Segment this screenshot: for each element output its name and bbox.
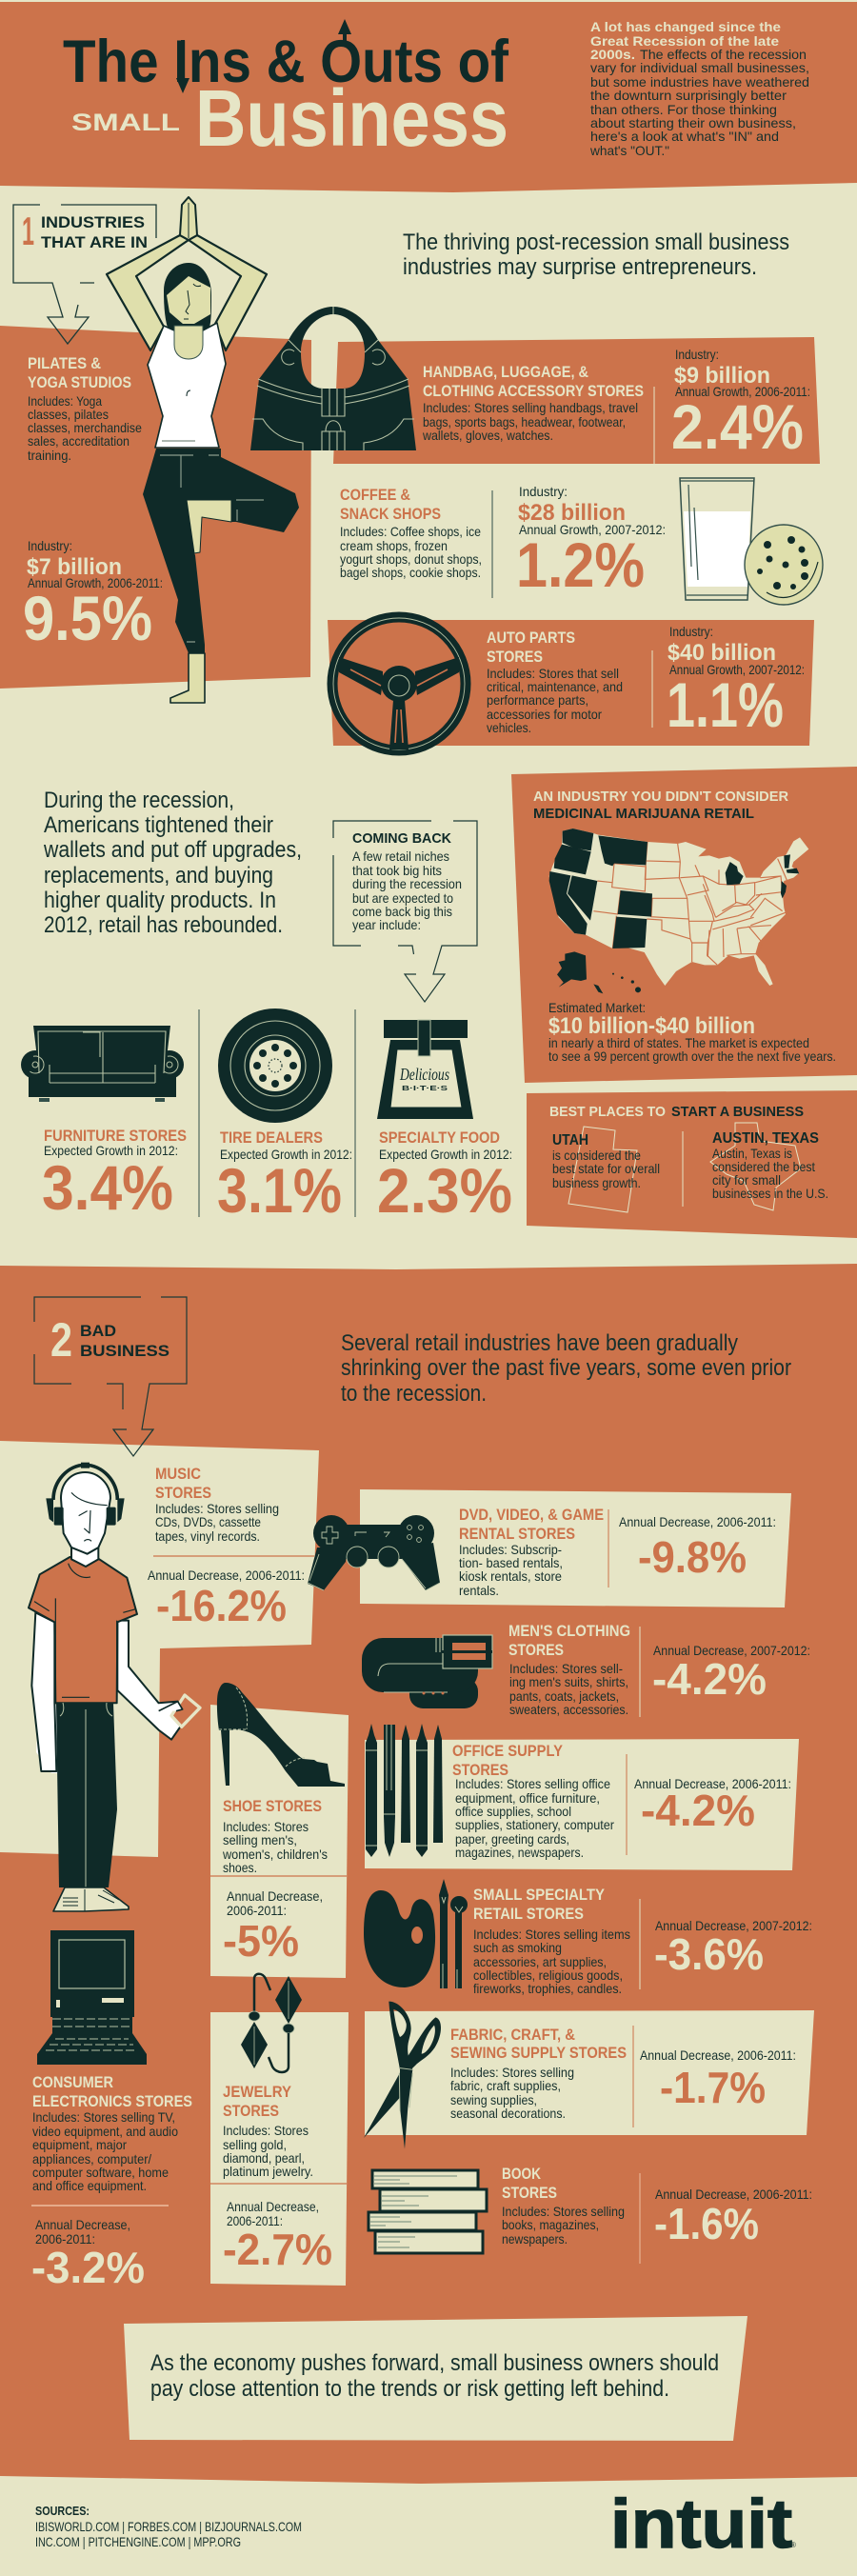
sources: IBISWORLD.COM | FORBES.COM | BIZJOURNALS.COM (35, 2519, 302, 2534)
text: jewelry block: platinum jewelry. (223, 2164, 313, 2179)
icon: folded shirt (362, 1635, 492, 1708)
text: office supply block (452, 1742, 791, 1860)
text: auto parts block: 1.1% (667, 669, 784, 740)
text: consumer electronics block: and office equipment. (32, 2178, 147, 2193)
text: shoe stores block: -5% (223, 1916, 299, 1966)
panel: best places to start a business: businesses in the U.S. (712, 1186, 828, 1201)
text: jewelry block: selling gold, (223, 2137, 287, 2152)
text: jewelry block: 2006-2011: (227, 2213, 283, 2228)
callout: coming back: year include: (352, 917, 421, 932)
text: handbag block: CLOTHING ACCESSORY STORES (423, 382, 644, 400)
section 2 badge: BAD (80, 1322, 116, 1340)
text: office supply block: STORES (452, 1761, 508, 1779)
text: coffee block: cream shops, frozen (340, 538, 448, 553)
section 1 intro text (403, 230, 789, 280)
text: mens clothing block: MEN'S CLOTHING (508, 1622, 630, 1640)
recession paragraph (43, 788, 302, 938)
text: book stores block: Includes: Stores selling (502, 2204, 625, 2219)
text: tire dealers: TIRE DEALERS (220, 1128, 323, 1147)
text: shoe stores block: Includes: Stores (223, 1819, 309, 1834)
text: coffee block: SNACK SHOPS (340, 505, 441, 523)
icon: earrings (241, 1974, 302, 2072)
text: coffee block: yogurt shops, donut shops, (340, 551, 482, 567)
intro text: The effects of the recession (640, 47, 807, 62)
text: consumer electronics block: 2006-2011: (35, 2231, 95, 2247)
intro text: the downturn surprisingly better (590, 88, 787, 103)
text: book stores block: BOOK (502, 2165, 542, 2183)
title: SMALL (71, 110, 180, 136)
section 2 badge: BUSINESS (80, 1342, 169, 1360)
text: furniture stores: FURNITURE STORES (44, 1127, 187, 1145)
panel: medicinal marijuana retail: AN INDUSTRY YOU DIDN'T CONSIDER (533, 789, 788, 805)
text: pilates block: Industry: (28, 538, 72, 553)
text: small specialty block: such as smoking (473, 1940, 562, 1955)
text: auto parts block: STORES (487, 648, 543, 666)
texas outline (710, 1123, 801, 1210)
icon: handbag (250, 307, 416, 450)
text: coffee block (340, 484, 666, 600)
section 1 intro text: The thriving post-recession small business (403, 230, 789, 255)
recession paragraph: higher quality products. In (44, 888, 276, 913)
text: consumer electronics block: ELECTRONICS STORES (32, 2092, 192, 2110)
recession paragraph: During the recession, (44, 788, 234, 813)
text: dvd rental block: tion- based rentals, (459, 1555, 563, 1570)
text: consumer electronics block: -3.2% (31, 2243, 145, 2292)
logo: intuit: ® (790, 2541, 796, 2549)
text: office supply block: office supplies, school (455, 1804, 571, 1819)
text: specialty food (377, 1128, 512, 1226)
section 1 badge (13, 205, 156, 344)
intro text: Great Recession of the late (590, 33, 779, 49)
text: small specialty block: RETAIL STORES (473, 1905, 584, 1923)
panel: fabric craft background (365, 2010, 814, 2135)
text: furniture stores: Expected Growth in 2012: (44, 1143, 178, 1158)
section 1 badge: 1 (22, 209, 34, 253)
text: shoe stores block: shoes. (223, 1860, 257, 1875)
icon: sofa (21, 1026, 184, 1102)
badge arrow tip over panel (113, 1429, 153, 1456)
text: dvd rental block: rentals. (459, 1583, 499, 1598)
text: fabric craft block (450, 2026, 796, 2127)
text: shoe stores block: women's, children's (222, 1847, 328, 1862)
icon: up arrow on O (338, 19, 351, 44)
callout: coming back: COMING BACK (352, 830, 451, 847)
callout: coming back: that took big hits (352, 863, 442, 878)
icon: game controller (308, 1515, 440, 1590)
icon: delicious bites bag (377, 1020, 473, 1119)
text: office supply block: paper, greeting cards, (455, 1831, 569, 1847)
text: fabric craft block: SEWING SUPPLY STORES (450, 2044, 627, 2062)
text: handbag block: Includes: Stores selling handbags, travel (423, 400, 638, 415)
panel: shoe stores background (210, 1705, 349, 1978)
text: music stores block: CDs, DVDs, cassette (155, 1514, 261, 1529)
text: consumer electronics block: computer software, home (32, 2165, 169, 2180)
panel: best places to start a business: is considered the (552, 1148, 641, 1163)
text: handbag block: $9 billion (674, 363, 770, 389)
text: coffee block: Industry: (519, 484, 568, 499)
text: coffee block: COFFEE & (340, 486, 410, 504)
section 2 badge (34, 1297, 187, 1456)
recession paragraph: wallets and put off upgrades, (43, 837, 302, 863)
section 1 badge: THAT ARE IN (41, 233, 148, 251)
panel: jewelry background (210, 2012, 349, 2286)
intro text: 2000s. (590, 47, 635, 62)
text: dvd rental block: DVD, VIDEO, & GAME (459, 1506, 604, 1524)
text: office supply block: supplies, stationery, computer (455, 1817, 614, 1832)
section 1 badge: INDUSTRIES (41, 213, 145, 231)
text: handbag block: Annual Growth, 2006-2011: (675, 384, 810, 399)
title: The Ins & Outs of (63, 29, 509, 95)
callout: coming back: but are expected to (352, 890, 453, 906)
panel: best places to start a business: Austin, Texas is (712, 1146, 792, 1161)
text: music stores block: tapes, vinyl records. (155, 1528, 260, 1544)
panel: conclusion: As the economy pushes forward, small business owners should (150, 2350, 719, 2376)
text: small specialty block: -3.6% (654, 1929, 764, 1979)
logo: intuit: intuit (610, 2486, 792, 2563)
text: dvd rental block: Includes: Subscrip- (459, 1542, 562, 1557)
text: small specialty block: SMALL SPECIALTY (473, 1886, 606, 1904)
text: music stores block: MUSIC (155, 1465, 201, 1483)
callout: coming back: come back big this (352, 904, 452, 919)
callout: coming back (333, 821, 477, 1002)
text: music stores block (148, 1465, 314, 1630)
text: pilates block: YOGA STUDIOS (28, 373, 131, 391)
icon: scissors (364, 2002, 441, 2149)
text: handbag block: bags, sports bags, headwear, footwear, (423, 414, 626, 429)
panel: best places to start a business: best state for overall (552, 1161, 660, 1176)
text: music stores block: -16.2% (156, 1581, 287, 1630)
panel: auto parts background (328, 620, 814, 746)
title (63, 29, 509, 163)
text: music stores block: Annual Decrease, 2006-2011: (148, 1568, 305, 1583)
icon: glass of milk and cookie (680, 478, 823, 605)
panel: medicinal marijuana retail: MEDICINAL MARIJUANA RETAIL (533, 806, 754, 822)
text: jewelry block (210, 2083, 347, 2274)
text: auto parts block: $40 billion (668, 640, 776, 666)
text: small specialty block: accessories, art supplies, (473, 1954, 607, 1969)
section 2 background (0, 1264, 857, 2484)
text: handbag block (422, 347, 810, 464)
text: small specialty block: fireworks, trophies, candles. (473, 1981, 622, 1996)
intro text: about starting their own business, (590, 115, 796, 130)
text: handbag block: wallets, gloves, watches. (422, 428, 553, 443)
text: pilates block: sales, accreditation (28, 433, 130, 449)
text: mens clothing block: STORES (508, 1641, 564, 1659)
panel: best places to start a business: BEST PLACES TO (549, 1104, 666, 1120)
text: mens clothing block: ing men's suits, shirts, (509, 1674, 628, 1689)
icon: high heel shoe (217, 1683, 345, 1787)
text: jewelry block: -2.7% (223, 2225, 332, 2274)
text: auto parts block (487, 624, 805, 740)
text: tire dealers (217, 1128, 352, 1226)
text: pilates block: Includes: Yoga (28, 393, 102, 409)
panel: best places to start a business: UTAH (552, 1132, 588, 1148)
text: small specialty block: Includes: Stores selling items (473, 1927, 630, 1942)
text: jewelry block: diamond, pearl, (223, 2150, 305, 2166)
intro text: vary for individual small businesses, (590, 60, 809, 75)
icon: delicious bites bag: Delicious (399, 1065, 449, 1084)
text: coffee block: Includes: Coffee shops, ice (340, 524, 481, 539)
text: shoe stores block: selling men's, (223, 1832, 297, 1847)
text: shoe stores block: SHOE STORES (223, 1797, 322, 1815)
text: pilates block: $7 billion (27, 554, 122, 580)
text: shoe stores block (210, 1797, 347, 1966)
intro text: what's "OUT." (589, 143, 669, 158)
text: book stores block: books, magazines, (502, 2217, 599, 2232)
header band (0, 2, 857, 192)
text: consumer electronics block (31, 2073, 192, 2292)
text: dvd rental block: kiosk rentals, store (459, 1568, 562, 1584)
text: furniture stores: 3.4% (42, 1152, 173, 1223)
text: auto parts block: Industry: (669, 624, 713, 639)
section 2 intro text: shrinking over the past five years, some even prior (341, 1355, 791, 1381)
text: consumer electronics block: video equipment, and audio (32, 2124, 178, 2139)
section 1 intro text: industries may surprise entrepreneurs. (403, 254, 757, 280)
divider between sofa and tire (198, 1009, 200, 1217)
sources: SOURCES: (35, 2504, 90, 2518)
intro text: here's a look at what's "IN" and (590, 129, 779, 144)
text: book stores block: STORES (502, 2184, 557, 2202)
text: jewelry block: JEWELRY (223, 2083, 292, 2101)
text: consumer electronics block: CONSUMER (32, 2073, 113, 2091)
text: small specialty block (473, 1886, 812, 1996)
intro text: than others. For those thinking (590, 102, 777, 117)
text: office supply block: Includes: Stores selling office (455, 1776, 610, 1791)
text: office supply block: -4.2% (641, 1786, 755, 1835)
callout: coming back: A few retail niches (352, 849, 449, 864)
text: pilates block: classes, merchandise (28, 420, 142, 435)
text: auto parts block: AUTO PARTS (487, 629, 575, 647)
text: pilates block: PILATES & (28, 354, 101, 372)
text: fabric craft block: Annual Decrease, 2006-2011: (640, 2047, 796, 2063)
text: book stores block: Annual Decrease, 2006-2011: (655, 2187, 812, 2202)
text: music stores block: Includes: Stores selling (155, 1501, 279, 1516)
text: mens clothing block: -4.2% (652, 1654, 767, 1704)
text: office supply block: OFFICE SUPPLY (452, 1742, 564, 1760)
icon: down arrow on I (176, 40, 189, 93)
panel: dvd rental background (360, 1489, 791, 1608)
text: pilates block: training. (28, 448, 71, 463)
icon: yoga woman (107, 197, 299, 703)
text: office supply block: equipment, office furniture, (455, 1790, 600, 1806)
text: fabric craft block: -1.7% (660, 2063, 766, 2112)
utah outline (568, 1127, 637, 1212)
sources: INC.COM | PITCHENGINE.COM | MPP.ORG (35, 2534, 241, 2549)
text: office supply block: magazines, newspapers. (455, 1845, 584, 1860)
text: music stores block: STORES (155, 1484, 211, 1502)
icon: paint palette and brushes (364, 1879, 468, 1988)
panel: best places to start a business: city for small (712, 1172, 781, 1188)
text: jewelry block: STORES (223, 2102, 279, 2120)
text: auto parts block: performance parts, (487, 692, 588, 708)
text: auto parts block: vehicles. (487, 720, 531, 735)
panel: medicinal marijuana retail: in nearly a third of states. The market is expected (548, 1035, 809, 1050)
icon: pens and pencils (366, 1724, 443, 1857)
text: fabric craft block: fabric, craft supplies, (450, 2078, 561, 2093)
text: fabric craft block: Includes: Stores selling (450, 2065, 574, 2080)
panel: medicinal marijuana retail: Estimated Market: (548, 1000, 646, 1015)
text: book stores block: newspapers. (502, 2231, 568, 2247)
divider between tire and specialty food (354, 1009, 356, 1217)
section 2 intro text (341, 1330, 791, 1407)
text: mens clothing block (508, 1622, 810, 1717)
text: jewelry block: Annual Decrease, (227, 2199, 319, 2214)
panel: pilates background (0, 326, 311, 689)
text: mens clothing block: Includes: Stores sell- (509, 1661, 623, 1676)
sources (35, 2504, 302, 2549)
map: us states (549, 829, 808, 993)
text: pilates block (23, 354, 163, 653)
panel: best places to start a business (527, 1090, 857, 1238)
text: auto parts block: Annual Growth, 2007-2012: (669, 662, 805, 677)
icon: computer (37, 1930, 147, 2065)
callout: coming back: during the recession (352, 876, 462, 891)
text: consumer electronics block: Includes: Stores selling TV, (32, 2109, 175, 2125)
text: handbag block: HANDBAG, LUGGAGE, & (423, 363, 588, 381)
section 2 badge: 2 (50, 1313, 72, 1367)
text: specialty food: SPECIALTY FOOD (379, 1128, 500, 1147)
text: small specialty block: Annual Decrease, 2007-2012: (655, 1918, 812, 1933)
text: tire dealers: 3.1% (217, 1155, 342, 1226)
text: coffee block: bagel shops, cookie shops. (340, 565, 481, 580)
text: book stores block: -1.6% (654, 2199, 759, 2248)
text: consumer electronics block: appliances, computer/ (32, 2151, 151, 2167)
panel: conclusion (124, 2316, 747, 2441)
panel: office supply background (365, 1739, 799, 1870)
icon: stack of books (369, 2170, 487, 2253)
text: auto parts block: Includes: Stores that sell (487, 666, 619, 681)
recession paragraph: replacements, and buying (44, 863, 273, 889)
icon: delicious bites bag: B·I·T·E·S (402, 1086, 448, 1092)
text: dvd rental block: Annual Decrease, 2006-2011: (619, 1514, 776, 1529)
panel: music stores background (0, 1441, 319, 1857)
text: coffee block: 1.2% (516, 529, 645, 600)
text: handbag block: 2.4% (671, 391, 804, 462)
intro text: A lot has changed since the (590, 19, 781, 34)
text: jewelry block: Includes: Stores (223, 2123, 309, 2138)
panel: best places to start a business: AUSTIN, TEXAS (712, 1130, 819, 1147)
panel: best places to start a business: business growth. (552, 1175, 641, 1190)
text: pilates block: 9.5% (23, 583, 152, 653)
text: pilates block: Annual Growth, 2006-2011: (28, 575, 163, 590)
text: pilates block: classes, pilates (28, 407, 109, 422)
text: fabric craft block: sewing supplies, (450, 2092, 537, 2107)
panel: best places to start a business: START A BUSINESS (671, 1104, 804, 1120)
text: coffee block: Annual Growth, 2007-2012: (519, 522, 666, 537)
text: handbag block: Industry: (675, 347, 719, 362)
text: shoe stores block: Annual Decrease, (227, 1888, 323, 1904)
text: coffee block: $28 billion (518, 500, 626, 526)
text: shoe stores block: 2006-2011: (227, 1903, 287, 1918)
icon: tire (218, 1008, 332, 1123)
text: mens clothing block: sweaters, accessories. (509, 1702, 628, 1717)
panel: handbag background (333, 337, 820, 464)
text: dvd rental block: -9.8% (638, 1532, 747, 1582)
panel: medicinal marijuana retail (511, 767, 857, 1083)
intro text: but some industries have weathered (590, 74, 809, 90)
text: specialty food: 2.3% (377, 1155, 512, 1226)
text: consumer electronics block: equipment, major (32, 2137, 127, 2152)
intro text (589, 19, 809, 158)
recession paragraph: Americans tightened their (44, 812, 273, 838)
text: dvd rental block (459, 1506, 776, 1598)
text: consumer electronics block: Annual Decrease, (35, 2217, 130, 2232)
text: mens clothing block: Annual Decrease, 2007-2012: (653, 1643, 810, 1658)
text: specialty food: Expected Growth in 2012: (379, 1147, 512, 1162)
panel: best places to start a business: considered the best (712, 1159, 815, 1174)
text: fabric craft block: FABRIC, CRAFT, & (450, 2026, 575, 2044)
panel: medicinal marijuana retail: $10 billion-$40 billion (548, 1013, 755, 1039)
text: dvd rental block: RENTAL STORES (459, 1525, 575, 1543)
text: mens clothing block: pants, coats, jackets, (509, 1688, 619, 1704)
icon: man with headphones (29, 1463, 200, 1911)
text: office supply block: Annual Decrease, 2006-2011: (634, 1776, 791, 1791)
text: small specialty block: collectibles, religious goods, (473, 1967, 623, 1983)
panel: conclusion: pay close attention to the trends or risk getting left behind. (150, 2376, 669, 2402)
icon: steering wheel (332, 617, 466, 750)
text: book stores block (502, 2165, 812, 2264)
section 2 intro text: Several retail industries have been gradually (341, 1330, 738, 1356)
text: tire dealers: Expected Growth in 2012: (220, 1147, 352, 1162)
text: auto parts block: critical, maintenance, and (487, 679, 623, 694)
section 2 intro text: to the recession. (341, 1381, 487, 1407)
text: auto parts block: accessories for motor (487, 707, 602, 722)
recession paragraph: 2012, retail has rebounded. (44, 912, 283, 938)
title: Business (195, 73, 508, 163)
text: fabric craft block: seasonal decorations. (450, 2106, 566, 2121)
